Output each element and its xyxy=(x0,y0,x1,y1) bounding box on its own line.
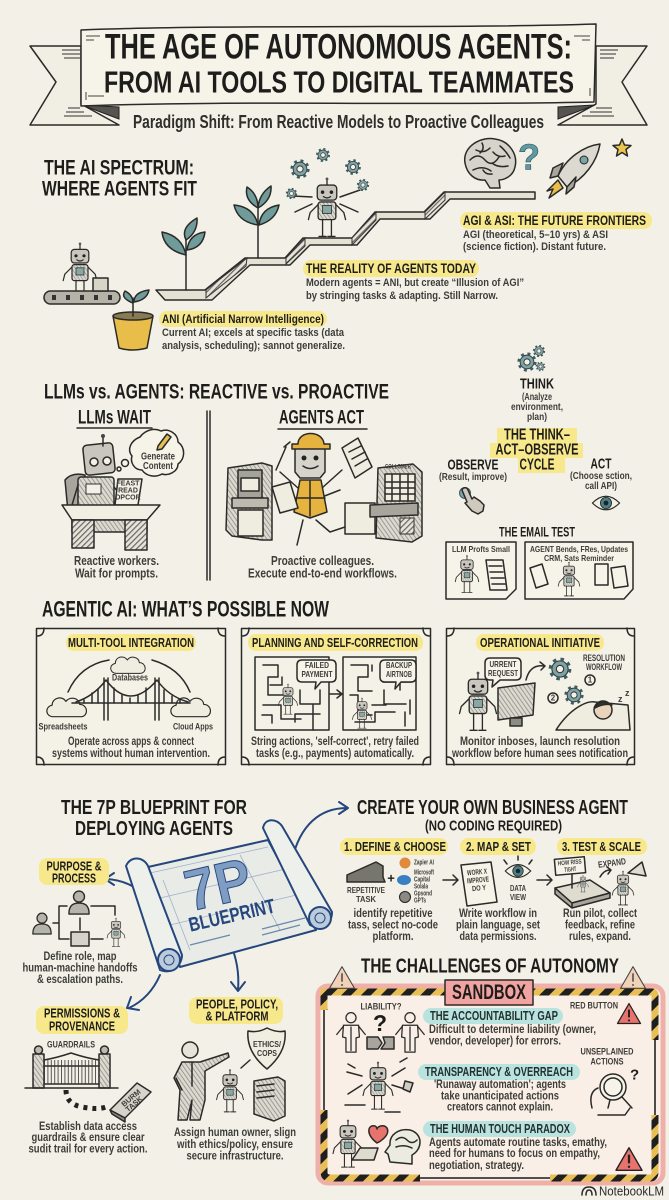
hazard frame xyxy=(324,992,655,1178)
icon: gate and footprints xyxy=(25,1046,118,1108)
icon: star xyxy=(613,139,631,156)
icon: magnifier xyxy=(591,1066,639,1115)
heading: PEOPLE, POLICY, xyxy=(196,996,278,1012)
banner main panel xyxy=(81,24,596,106)
icon: sandbox pilot: HOW RISS xyxy=(557,858,582,868)
cycle title: THE THINK– xyxy=(504,426,570,444)
section heading: agentic AI: AGENTIC AI: WHAT’S POSSIBLE NOW xyxy=(42,596,329,622)
cycle diagram: think act observe xyxy=(439,346,632,514)
cycle title: CYCLE xyxy=(520,456,554,474)
text block: AGI and ASI: (science fiction). Distant future. xyxy=(463,241,606,253)
caption: human-machine handoffs xyxy=(22,962,138,974)
email card: Agent: AGENT Bends, FRes, Updates xyxy=(530,544,628,554)
cycle title xyxy=(490,426,583,474)
sandbox panel xyxy=(318,967,663,1183)
icon: robot waiting at desk xyxy=(62,434,160,550)
icon: eye xyxy=(592,496,620,510)
label: TASK xyxy=(356,894,377,904)
heading text: THE ACCOUNTABILITY GAP xyxy=(430,1009,558,1023)
platform logos: Capital xyxy=(414,876,430,884)
section heading: LLMs vs Agents: LLMs vs. AGENTS: REACTIVE vs. PROACTIVE xyxy=(44,380,389,404)
panel caption xyxy=(251,736,419,760)
illustration: mazes: AIRTNOB xyxy=(386,669,412,679)
caption: plain language, set xyxy=(456,920,540,932)
warning triangle bottom right xyxy=(616,1148,642,1170)
caption: data permissions. xyxy=(460,931,536,943)
step 3: test and scale xyxy=(554,838,647,943)
platform logos: Microsoft xyxy=(414,870,434,876)
caption: Agents: Execute end-to-end workflows. xyxy=(248,566,397,580)
description: Agents automate routine tasks, emathy, xyxy=(429,1137,607,1149)
step 1: define and choose xyxy=(340,838,458,943)
heading: & PLATFORM xyxy=(206,1008,268,1024)
heading text: THE HUMAN TOUCH PARADOX xyxy=(430,1122,570,1136)
caption: with ethics/policy, ensure xyxy=(176,1139,293,1151)
step 2: map and set xyxy=(456,838,552,943)
arrow xyxy=(537,875,552,885)
caption: guardrails & ensure clear xyxy=(32,1132,145,1144)
thought bubble: generate content xyxy=(117,429,184,476)
panel: planning and self-correction xyxy=(242,628,430,765)
caption: feedback, refine xyxy=(565,920,635,932)
subheading: LLMs wait: LLMs WAIT xyxy=(78,408,151,428)
illustration: robot monitors while human sleeps: z xyxy=(618,694,623,704)
caption: Define role, map xyxy=(44,951,116,963)
heading: PROVENANCE xyxy=(49,1018,115,1034)
text block: ANI: Current AI; excels at specific tasks (data xyxy=(162,327,345,339)
label: observe: OBSERVE xyxy=(448,456,498,474)
label: observe xyxy=(439,456,507,483)
challenge: accountability gap xyxy=(337,1002,596,1052)
text block: AGI and ASI: AGI (theoretical, 5–10 yrs) & ASI xyxy=(463,229,608,241)
banner folds xyxy=(82,105,595,119)
panel heading: MULTI-TOOL INTEGRATION xyxy=(68,635,194,650)
label: act: call API) xyxy=(585,480,617,492)
panel caption xyxy=(451,736,628,760)
icon: yellow flower pot with sprout xyxy=(113,290,153,350)
heading xyxy=(39,858,109,886)
icon: workflow document: IMPROVE xyxy=(467,875,489,885)
caption: identify repetitive xyxy=(354,908,432,920)
caption: Assign human owner, slign xyxy=(174,1127,296,1139)
label: think: (Analyze xyxy=(522,391,552,403)
icon: server rack xyxy=(254,1077,285,1121)
illustration: mazes: BACKUP xyxy=(386,660,412,670)
section heading: 7P blueprint xyxy=(61,797,247,840)
text block: AGI and ASI xyxy=(460,212,652,253)
section heading: create your own agent xyxy=(357,797,628,834)
illustration: mazes: PAYMENT xyxy=(302,669,333,679)
email test title: THE EMAIL TEST xyxy=(499,524,576,540)
text block: reality of agents: Modern agents = ANI, but create “Illusion of AGI” xyxy=(306,277,524,289)
email test xyxy=(446,524,633,599)
email card: LLM xyxy=(446,542,516,599)
icon: right machines xyxy=(345,464,422,542)
arrows from blueprint xyxy=(105,802,348,1010)
description xyxy=(429,1137,607,1172)
icon: ethics shield xyxy=(241,1028,285,1069)
challenge: human touch paradox xyxy=(333,1120,607,1172)
label: think xyxy=(511,376,563,423)
blueprint label: 7P: 7P xyxy=(179,846,257,924)
icon: robot juggling gears xyxy=(287,149,368,236)
label on paper: FEAST xyxy=(117,480,140,488)
caption: LLMs: Reactive workers. xyxy=(74,554,159,568)
icon: pointing hand xyxy=(460,488,484,514)
label on paper xyxy=(115,480,141,502)
section heading: AI spectrum: WHERE AGENTS FIT xyxy=(42,178,197,200)
illustration: bridge between tools: Cloud Apps xyxy=(173,722,213,732)
panel caption: systems without human intervention. xyxy=(52,748,210,760)
illustration: bridge between tools xyxy=(38,657,213,732)
illustration: robot monitors while human sleeps xyxy=(460,653,630,730)
cycle title: ACT–OBSERVE xyxy=(496,442,578,458)
heading: PROCESS xyxy=(52,870,96,886)
caption xyxy=(174,1127,296,1162)
heading text: TRANSPARENCY & OVERREACH xyxy=(425,1065,573,1079)
step heading: 3. TEST & SCALE xyxy=(562,839,641,854)
panel caption: Monitor inboses, launch resolution xyxy=(460,736,620,748)
illustration: bridge between tools: Databases xyxy=(112,672,148,684)
label: unexplained actions: UNSEPLAINED xyxy=(580,1046,634,1058)
caption xyxy=(456,908,540,943)
label: expand: EXPAND xyxy=(597,856,627,870)
step heading: 1. DEFINE & CHOOSE xyxy=(344,839,446,854)
blueprint label: BLUEPRINT: BLUEPRINT xyxy=(187,895,277,937)
caption: rules, expand. xyxy=(569,931,631,943)
section heading: 7P blueprint: THE 7P BLUEPRINT FOR xyxy=(61,797,247,819)
panel heading: PLANNING AND SELF-CORRECTION xyxy=(252,635,418,650)
icon: audit book: TASK xyxy=(123,1094,145,1114)
panel outer glow and fill xyxy=(318,986,663,1183)
title banner xyxy=(30,24,647,125)
icon: runaway robot xyxy=(345,1058,413,1112)
illustration: bridge between tools: Spreadsheets xyxy=(38,722,88,732)
heading: PURPOSE & xyxy=(46,858,102,874)
caption: Agents xyxy=(248,554,397,580)
illustration: robot monitors while human sleeps: REQUEST xyxy=(488,668,519,678)
tail hatching xyxy=(62,50,618,116)
caption: LLMs: Wait for prompts. xyxy=(75,566,158,580)
icon: robot, heart and human head xyxy=(333,1120,420,1167)
icon: magnifier: ? xyxy=(630,1066,639,1084)
heading xyxy=(189,996,283,1024)
icon: sandbox pilot: TIGHT xyxy=(564,866,577,874)
platform logos: Solala xyxy=(414,884,428,890)
label: act xyxy=(570,456,632,492)
description: 'Runaway automation'; agents xyxy=(434,1079,566,1091)
icon: busy agent robot xyxy=(272,434,372,545)
thought bubble: generate content: Content xyxy=(143,461,174,472)
label: GUARDRAILS xyxy=(47,1040,95,1050)
description: Difficult to determine liability (owner, xyxy=(429,1024,596,1036)
icon: workflow document: WORK X xyxy=(467,867,487,877)
icon: sandbox pilot xyxy=(554,857,610,908)
blueprint scroll xyxy=(126,820,332,971)
block: purpose and process xyxy=(22,858,138,986)
heading pill xyxy=(423,1121,576,1137)
step heading: 2. MAP & SET xyxy=(466,839,531,854)
panel heading: OPERATIONAL INITIATIVE xyxy=(480,635,600,650)
description: vendor, developer) for errors. xyxy=(429,1036,561,1048)
icon: workflow document xyxy=(461,862,497,906)
panel caption: String actions, 'self-correct', retry failed xyxy=(251,736,419,748)
icon: shrugging figures: ? xyxy=(373,1010,387,1036)
panel heading xyxy=(476,634,604,651)
email card: LLM: LLM Profts Small xyxy=(452,544,510,554)
label: act: (Choose sction, xyxy=(570,470,632,482)
caption: Write workflow in xyxy=(459,908,537,920)
section heading: AI spectrum xyxy=(42,156,197,200)
NotebookLM watermark: NotebookLM xyxy=(599,1184,664,1198)
banner inner ticks xyxy=(86,36,590,100)
block: people, policy, platform xyxy=(174,996,296,1162)
icon: robot with megaphone xyxy=(600,862,646,905)
icon: think gears xyxy=(519,346,545,371)
label on paper: READ xyxy=(118,488,138,494)
label: think: plan) xyxy=(527,411,547,423)
icon: audit book: BURM xyxy=(119,1087,143,1109)
heading pill xyxy=(423,1008,563,1024)
caption: platform. xyxy=(372,931,414,943)
description xyxy=(429,1024,596,1048)
platform logos: Zapier AI xyxy=(414,860,434,866)
subheading: agents act: AGENTS ACT xyxy=(279,408,364,428)
vertical divider xyxy=(207,411,210,580)
caption: & escalation paths. xyxy=(37,974,123,986)
panel: multi-tool integration xyxy=(36,628,226,765)
icon: robot on conveyor belt xyxy=(44,243,120,304)
icon: question mark: ? xyxy=(518,136,540,178)
caption xyxy=(22,951,138,986)
label: observe: (Result, improve) xyxy=(439,471,507,483)
section heading: AI spectrum: THE AI SPECTRUM: xyxy=(44,156,194,180)
icon: data view eye: DATA xyxy=(510,883,526,893)
icon: small robot xyxy=(217,1069,243,1112)
illustration: robot monitors while human sleeps: 1 xyxy=(588,676,593,684)
description xyxy=(434,1079,566,1114)
icon: brain xyxy=(465,138,516,188)
label xyxy=(347,885,385,904)
thought bubble: generate content: Generate xyxy=(141,452,175,462)
arrow xyxy=(443,875,458,885)
email card: Agent: CRM, Sats Reminder xyxy=(544,553,615,563)
panel: operational initiative xyxy=(446,628,634,765)
staircase xyxy=(156,192,535,300)
panel heading xyxy=(248,634,423,651)
label on paper: DPCOR xyxy=(115,494,141,502)
sandbox sign xyxy=(445,980,533,1005)
caption: sudit trail for every action. xyxy=(28,1144,148,1156)
heading: PERMISSIONS & xyxy=(44,1006,120,1020)
label: red button: RED BUTTON xyxy=(570,1000,618,1012)
icon: handoff flow xyxy=(33,891,125,946)
caption: LLMs xyxy=(74,554,159,580)
challenge: transparency xyxy=(345,1058,580,1114)
caption: tass, select no-code xyxy=(348,920,438,932)
illustration: robot monitors while human sleeps: URRENT xyxy=(490,659,517,669)
caption: Establish data access xyxy=(39,1121,137,1133)
icon: right machines: COLLOMER xyxy=(385,464,411,470)
warning triangle right xyxy=(620,967,646,988)
block: permissions and provenance xyxy=(25,1006,151,1156)
caption xyxy=(28,1121,148,1156)
illustration: robot monitors while human sleeps: WORKFLOW xyxy=(586,662,622,672)
section heading: create your own agent: (NO CODING REQUIRED) xyxy=(425,818,562,834)
banner right tail xyxy=(558,46,647,125)
illustration: robot monitors while human sleeps: 2 xyxy=(551,694,556,702)
caption: Run pilot, collect xyxy=(563,908,637,920)
description: negotiation, strategy. xyxy=(429,1160,524,1172)
description: need for humans to focus on empathy, xyxy=(429,1148,600,1160)
text block: ANI: ANI (Artificial Narrow Intelligence) xyxy=(162,312,324,326)
section heading: 7P blueprint: DEPLOYING AGENTS xyxy=(75,818,233,840)
icon: growing plants xyxy=(162,186,279,290)
email card: Agent xyxy=(525,542,633,599)
panel caption: workflow before human sees notification xyxy=(451,748,628,760)
label: unexplained actions xyxy=(580,1046,634,1068)
icon: left machine xyxy=(226,463,272,540)
icon: shrugging figures xyxy=(337,1002,424,1052)
heading pill xyxy=(418,1064,580,1080)
illustration: robot monitors while human sleeps: z xyxy=(625,688,630,698)
label: think: THINK xyxy=(520,376,554,392)
platform logos: Gpsond xyxy=(414,890,432,898)
plus: + xyxy=(387,870,395,886)
platform logos xyxy=(397,858,434,904)
subtitle: Paradigm Shift: From Reactive Models to Proactive Colleagues xyxy=(133,112,544,132)
description: take unanticipated actions xyxy=(441,1090,559,1102)
icon: audit book xyxy=(110,1083,151,1122)
illustration: mazes xyxy=(255,657,416,730)
label: REPETITIVE xyxy=(347,885,385,895)
description: creators cannot explain. xyxy=(447,1102,553,1114)
platform logos: GPTs xyxy=(414,898,426,904)
illustration: robot monitors while human sleeps: RESOLUTION xyxy=(583,653,625,663)
icon: ethics shield: COPS xyxy=(257,1048,277,1058)
text block: ANI xyxy=(159,311,345,352)
icon: data view eye: VIEW xyxy=(510,892,527,902)
panel heading xyxy=(66,634,196,651)
icon: ethics shield: ETHICS/ xyxy=(253,1039,282,1049)
warning triangle left xyxy=(330,967,354,988)
icon: shrugging figures: LIABILITY? xyxy=(360,1002,402,1012)
panel caption xyxy=(52,736,210,760)
subheading: agents act xyxy=(278,408,367,429)
text block: ANI: analysis, scheduling); sannot generalize. xyxy=(162,340,345,352)
illustration: mazes: FAILED xyxy=(305,660,329,670)
caption: Agents: Proactive colleagues. xyxy=(271,554,374,568)
caption xyxy=(563,908,637,943)
icon: rocket xyxy=(547,144,600,198)
panel caption: Operate across apps & connect xyxy=(68,736,194,748)
label: unexplained actions: ACTIONS xyxy=(590,1056,624,1068)
text block: reality of agents: by stringing tasks & adapting. Still Narrow. xyxy=(306,290,498,302)
text block: reality of agents xyxy=(303,260,524,302)
label: red button xyxy=(570,1000,640,1023)
text block: reality of agents: THE REALITY OF AGENTS TODAY xyxy=(306,261,476,276)
icon: stapler xyxy=(347,862,385,882)
sandbox sign: SANDBOX xyxy=(452,981,526,1004)
panel caption: tasks (e.g., payments) automatically. xyxy=(256,748,414,760)
icon: data view eye xyxy=(504,856,532,902)
label: act: ACT xyxy=(590,456,612,472)
caption xyxy=(348,908,438,943)
label: think: environment, xyxy=(511,401,563,413)
icon: manager pointing xyxy=(174,1042,229,1120)
banner left tail xyxy=(30,46,119,125)
caption: secure infrastructure. xyxy=(186,1150,284,1162)
heading xyxy=(36,1006,128,1034)
icon: workflow document: DO Y xyxy=(472,883,486,893)
